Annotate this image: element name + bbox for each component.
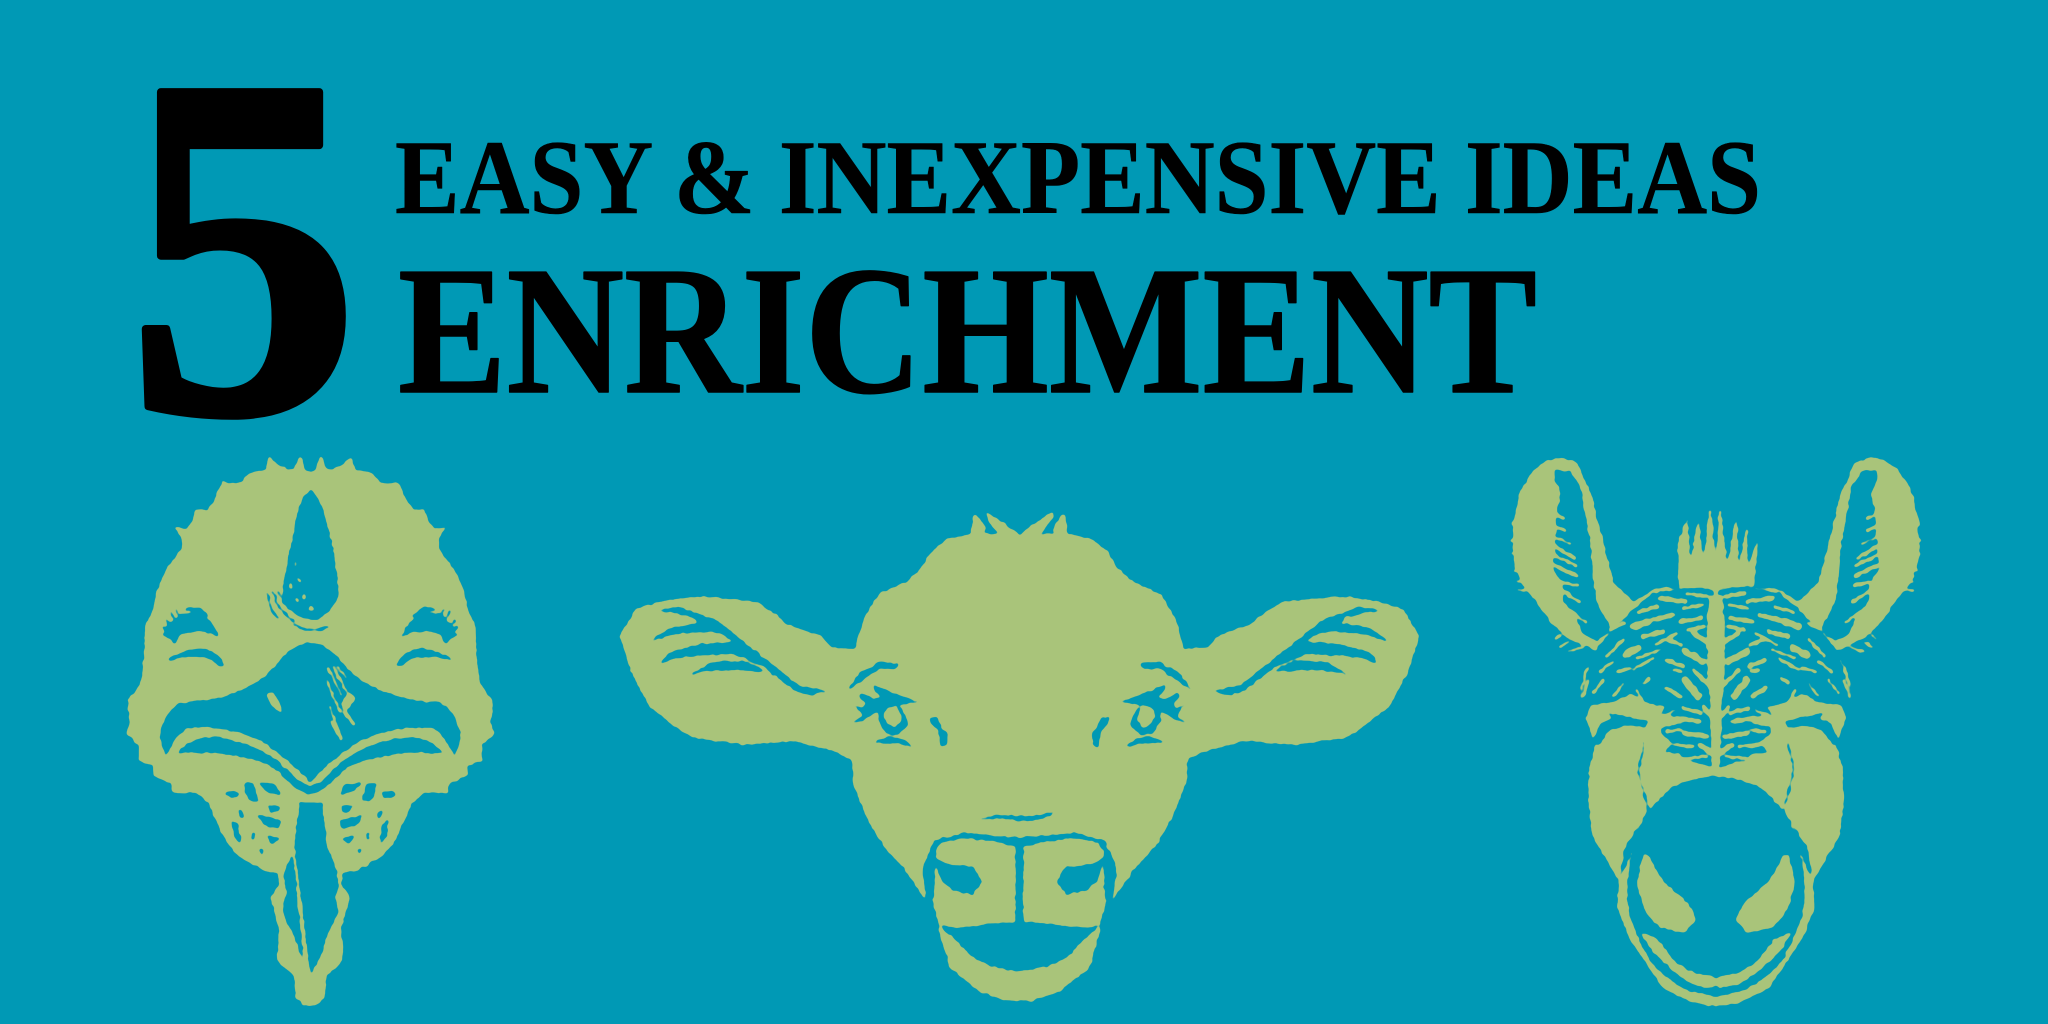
donkey mane tuft [1679, 511, 1757, 587]
bird beak hatching [327, 667, 355, 739]
bird forehead speckles [289, 561, 314, 611]
title: line one: EASY & INEXPENSIVE IDEAS [395, 119, 1761, 236]
icon: calf head [612, 505, 1427, 1010]
bird beak nostril [267, 692, 283, 714]
bird forehead wrinkles [267, 592, 328, 630]
title: line two: ENRICHMENT [398, 229, 1537, 432]
bird forehead patch [283, 491, 338, 619]
icon: bird head [120, 450, 500, 1012]
icon: donkey head [1503, 450, 1929, 1012]
bird tongue [295, 803, 338, 974]
bird beak highlight [341, 691, 356, 713]
calf upper lip line [979, 813, 1054, 820]
